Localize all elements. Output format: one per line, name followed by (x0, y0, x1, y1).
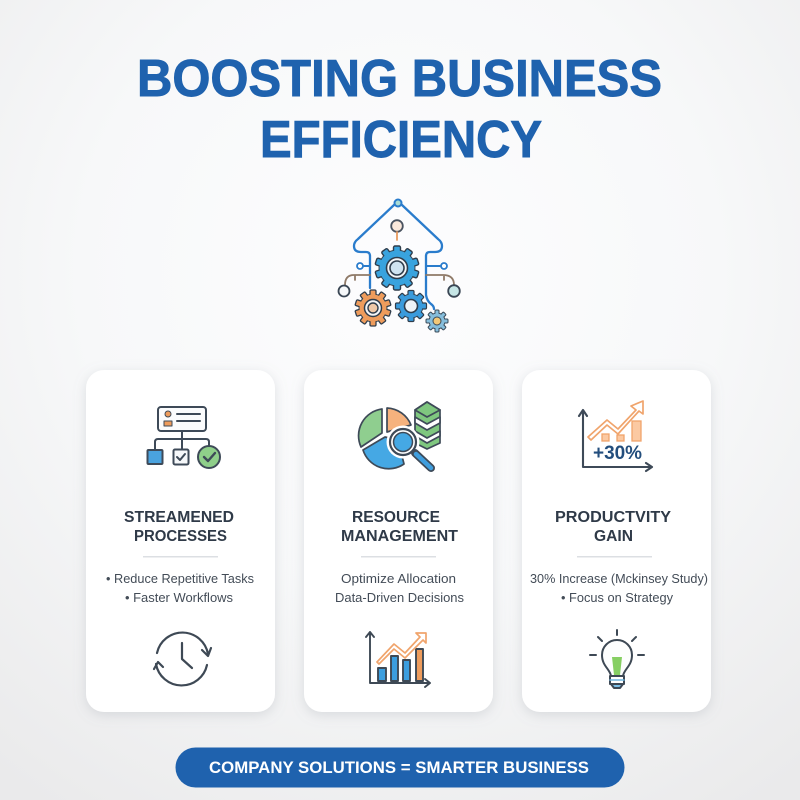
panel: productivity gain (522, 370, 711, 712)
text: streamened bullets (106, 571, 254, 605)
text: productivity bullets (530, 571, 708, 605)
text: resource bullets (335, 571, 464, 605)
icon: pie chart, magnifier and data stack (359, 402, 440, 469)
icon: large blue gear (375, 246, 419, 290)
heading: streamened processes: PROCESSES (134, 528, 227, 545)
heading: resource management: MANAGEMENT (341, 528, 458, 545)
icon: clock with cycle arrows (154, 633, 211, 685)
title: BOOSTING BUSINESS (137, 50, 662, 108)
panel: streamlined processes (86, 370, 275, 712)
text: resource bullets: Data-Driven Decisions (335, 590, 464, 605)
icon: growth chart +30% (579, 401, 652, 471)
heading: resource management (341, 509, 458, 545)
banner: company solutions (176, 748, 624, 788)
title (137, 50, 662, 169)
heading: resource management: RESOURCE (352, 509, 440, 526)
text: streamened bullets: • Faster Workflows (125, 590, 233, 605)
heading: productivity gain (555, 509, 671, 545)
heading: productivity gain: PRODUCTVITY (555, 509, 671, 526)
icon: bar chart with arrow (366, 632, 430, 687)
banner: company solutions: COMPANY SOLUTIONS = SMARTER BUSINESS (209, 758, 589, 777)
text: streamened bullets: • Reduce Repetitive Tasks (106, 571, 254, 586)
icon: workflow hierarchy (148, 407, 220, 468)
heading: streamened processes (124, 509, 234, 545)
panel: resource management (304, 370, 493, 712)
icon: house with gears (338, 200, 460, 332)
heading: streamened processes: STREAMENED (124, 509, 234, 526)
icon: light bulb (590, 630, 644, 688)
text: resource bullets: Optimize Allocation (341, 571, 456, 586)
icon: orange gear (355, 290, 391, 326)
title: EFFICIENCY (260, 111, 542, 169)
heading: productivity gain: GAIN (594, 528, 633, 545)
icon: small teal gear (426, 310, 448, 332)
text: productivity bullets: • Focus on Strategy (561, 590, 673, 605)
stat: +30%: +30% (593, 443, 642, 464)
icon: medium blue gear (396, 290, 426, 322)
text: productivity bullets: 30% Increase (Mckinsey Study) (530, 571, 708, 586)
